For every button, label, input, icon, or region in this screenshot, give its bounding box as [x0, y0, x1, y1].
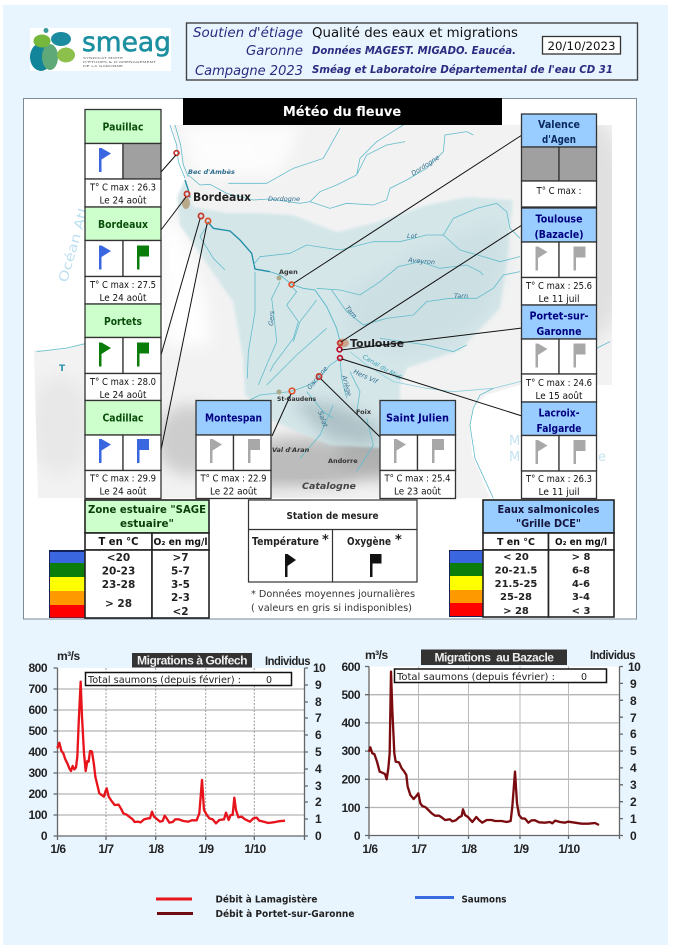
right axis labels: 9: [630, 677, 637, 691]
station: Toulouse (Bazacle): (Bazacle): [534, 228, 584, 241]
total box: 0: [581, 672, 587, 683]
legend: salmonid waters: 4-6: [572, 579, 590, 590]
unit labels: m³/s: [57, 649, 80, 663]
map labels: Bordeaux: [193, 190, 252, 204]
legend item: Lamagistère: Débit à Lamagistère: [216, 894, 318, 906]
legend: station de mesure: Température: [252, 536, 319, 548]
station: Portets: Portets: [104, 315, 142, 328]
station: Portet-sur-Garonne: Le 15 août: [536, 390, 583, 402]
legend: salmonid waters: > 8: [572, 552, 590, 563]
right axis labels: 1: [630, 812, 637, 826]
station: Montespan: T° C max : 22.9: [200, 474, 267, 484]
map labels: Ariège: [340, 373, 353, 397]
right axis labels: 10: [628, 660, 641, 674]
station: Bordeaux: T° C max : 27.5: [89, 280, 156, 291]
date box: [542, 36, 620, 54]
left axis labels: 100: [28, 808, 48, 822]
legend: estuary zone: estuaire": [120, 517, 174, 530]
x axis labels: 1/10: [558, 842, 581, 856]
legend: salmonid waters: 21.5-25: [495, 579, 537, 590]
discharge line: Lamagistère: [57, 682, 285, 823]
pale coastal strip and relief shading: [30, 120, 628, 505]
station: Cadillac: Le 24 août: [100, 486, 147, 498]
station: Toulouse (Bazacle): [522, 208, 596, 305]
map labels: Catalogne: [302, 482, 356, 492]
legend item: Saumons: [415, 894, 507, 906]
map title: [183, 98, 502, 125]
left axis labels: 300: [28, 766, 48, 780]
station: Toulouse (Bazacle): Le 11 juil: [538, 294, 580, 305]
unit labels: [365, 648, 636, 662]
station: Cadillac: [85, 400, 161, 498]
station: Portets: Le 24 août: [100, 389, 147, 401]
map labels: Toulouse: [350, 337, 404, 350]
chart legend: [156, 894, 507, 920]
x axis labels: 1/7: [98, 842, 114, 856]
station: Saint Julien: Le 23 août: [394, 486, 441, 498]
right axis labels: [628, 660, 641, 843]
left axis labels: 200: [341, 772, 361, 786]
station: Saint Julien: T° C max : 25.4: [384, 474, 451, 484]
left axis labels: 300: [341, 744, 361, 758]
map labels: Aveyron: [407, 256, 435, 266]
left axis labels: 0: [41, 829, 48, 843]
right axis labels: [313, 661, 326, 843]
x axis labels: 1/7: [411, 842, 427, 856]
map labels: e: [598, 450, 606, 465]
date box: 20/10/2023: [548, 39, 616, 53]
station: Montespan: [196, 400, 271, 498]
footnote: ( valeurs en gris si indisponibles): [251, 603, 412, 614]
campaign title: Campagne 2023: [195, 64, 303, 79]
legend: estuary zone: > 28: [105, 598, 132, 610]
x axis labels: 1/8: [461, 842, 477, 856]
footnote: [251, 589, 415, 614]
chart title: Migrations à Golfech: [137, 654, 247, 668]
station: Valence d'Agen: d'Agen: [542, 133, 576, 146]
map labels: Agen: [279, 268, 298, 276]
legend: station de mesure: Oxygène: [347, 536, 391, 548]
station: Valence d'Agen: T° C max :: [536, 186, 582, 197]
legend item: Portet-sur-Garonne: [157, 909, 354, 920]
header box: [186, 23, 638, 80]
logo: smeag: DE LA GARONNE: [83, 64, 123, 68]
map title: Météo du fleuve: [283, 105, 401, 120]
map labels: Val d'Aran: [272, 446, 310, 454]
legend: salmonid waters: 6-8: [572, 566, 590, 576]
station: Lacroix-Falgarde: Lacroix-: [538, 406, 580, 420]
station: Pauillac: [85, 110, 161, 207]
panel: map: [24, 98, 636, 619]
station: Lacroix-Falgarde: T° C max : 26.3: [525, 474, 592, 485]
right axis labels: 8: [315, 695, 322, 709]
data sources: [312, 44, 613, 76]
discharge line: Portet-sur-Garonne: [369, 672, 599, 825]
right axis labels: 2: [315, 795, 322, 809]
x axis labels: 1/6: [50, 842, 66, 856]
footnote: * Données moyennes journalières: [251, 589, 415, 600]
logo: smeag: D'ETUDES & D'AMENAGEMENT: [83, 60, 156, 64]
legend: station de mesure: Station de mesure: [286, 511, 378, 522]
station: Valence d'Agen: Valence: [538, 118, 580, 131]
map labels: Canal du Midi: [361, 353, 403, 382]
total box: [394, 669, 606, 683]
station: Portets: T° C max : 28.0: [89, 377, 156, 388]
map labels: M: [509, 434, 520, 449]
map labels: Océan Atl: [56, 207, 92, 284]
map labels: T: [59, 364, 66, 374]
left axis labels: [28, 661, 48, 843]
station: Portet-sur-Garonne: Garonne: [536, 325, 582, 338]
unit labels: Individus: [265, 654, 311, 668]
station: Bordeaux: Le 24 août: [100, 292, 147, 304]
chart: Migrations à Golfech: [28, 649, 326, 856]
left axis labels: 600: [28, 703, 48, 717]
right axis labels: 3: [630, 778, 637, 792]
legend: estuary zone: 2-3: [171, 592, 190, 604]
left axis labels: 500: [341, 688, 361, 702]
station: Saint Julien: Saint Julien: [386, 412, 449, 424]
left axis labels: 400: [341, 716, 361, 730]
legend: salmonid waters: < 3: [572, 606, 590, 617]
map labels: Tarn: [343, 304, 359, 320]
legend: estuary zone: >7: [172, 552, 189, 564]
left axis labels: 600: [341, 660, 361, 674]
unit labels: m³/s: [365, 648, 388, 662]
right axis labels: 10: [313, 661, 326, 675]
station: Portets: [85, 304, 161, 401]
legend: estuary zone: [49, 500, 209, 618]
right axis labels: 0: [315, 829, 322, 843]
station: Montespan: Le 22 août: [210, 486, 257, 498]
station: Montespan: Montespan: [205, 412, 262, 424]
legend: salmonid waters: < 20: [503, 552, 529, 563]
left axis labels: 0: [354, 829, 361, 843]
left axis labels: 100: [341, 801, 361, 815]
legend: estuary zone: <2: [172, 606, 189, 618]
legend: estuary zone: 23-28: [102, 579, 135, 591]
station: Bordeaux: [85, 207, 161, 304]
logo: smeag: [30, 27, 171, 71]
x axis labels: [50, 842, 267, 856]
chart: Migrations au Bazacle: [341, 648, 641, 856]
station: Valence d'Agen: [522, 114, 596, 207]
Garonne basin: [177, 180, 513, 448]
legend: estuary zone: 3-5: [171, 579, 190, 591]
station: Toulouse (Bazacle): T° C max : 25.6: [525, 281, 592, 292]
chart title: Migrations au Bazacle: [434, 650, 554, 664]
left axis labels: [341, 660, 361, 843]
right axis labels: 0: [630, 829, 637, 843]
right axis labels: 8: [630, 694, 637, 708]
station markers: [174, 151, 349, 394]
map labels: Dordogne: [268, 195, 300, 203]
map labels: Foix: [356, 408, 372, 416]
x axis labels: 1/10: [244, 842, 267, 856]
legend: station de mesure: *: [395, 533, 402, 548]
left axis labels: 400: [28, 745, 48, 759]
station: Pauillac: T° C max : 26.3: [89, 182, 156, 194]
map labels: M: [509, 450, 520, 465]
station: Cadillac: Cadillac: [102, 412, 144, 424]
logo: smeag: smeag: [82, 27, 171, 58]
logo: smeag: SYNDICAT MIXTE: [83, 56, 123, 60]
campaign title: Soutien d'étiage: [193, 26, 303, 41]
total box: Total saumons (depuis février) :: [396, 672, 555, 683]
x axis labels: 1/9: [198, 842, 214, 856]
legend: estuary zone: T en °C: [98, 536, 139, 548]
legend item: Saumons: Saumons: [462, 894, 507, 906]
x axis labels: 1/6: [362, 842, 378, 856]
left axis labels: 800: [28, 661, 48, 675]
campaign title: [193, 26, 303, 79]
left axis labels: 200: [28, 787, 48, 801]
x axis labels: 1/8: [148, 842, 164, 856]
map labels: [56, 154, 606, 492]
legend: salmonid waters: 3-4: [572, 592, 590, 603]
data sources: Sméag et Laboratoire Départemental de l'eau CD 31: [312, 63, 613, 76]
colour scale: [449, 550, 483, 617]
station: Bordeaux: Bordeaux: [98, 218, 148, 231]
station: Toulouse (Bazacle): Toulouse: [536, 212, 582, 226]
icon: oxygen flag: [370, 554, 382, 577]
legend: estuary zone: O₂ en mg/l: [154, 537, 208, 548]
legend: estuary zone: 20-23: [102, 566, 135, 578]
map labels: Bec d'Ambès: [188, 168, 235, 176]
map labels: Tarn: [454, 292, 468, 300]
colour scale: [49, 550, 85, 618]
right axis labels: 7: [630, 711, 637, 725]
map labels: Garonne: [305, 365, 329, 391]
station: Cadillac: T° C max : 29.9: [89, 474, 156, 484]
rivers: [37, 125, 610, 498]
station: Lacroix-Falgarde: [522, 402, 596, 498]
right axis labels: 3: [315, 779, 322, 793]
station: Lacroix-Falgarde: Falgarde: [536, 422, 582, 435]
map labels: Salat: [316, 410, 329, 429]
legend: station de mesure: [248, 500, 417, 582]
data sources: Données MAGEST. MIGADO. Eaucéa.: [312, 44, 516, 57]
legend: station de mesure: *: [322, 533, 329, 548]
legend: salmonid waters: 25-28: [500, 592, 532, 603]
right axis labels: 9: [315, 678, 322, 692]
legend: salmonid waters: T en °C: [497, 537, 535, 548]
unit labels: Individus: [590, 648, 636, 662]
station: Lacroix-Falgarde: Le 11 juil: [538, 487, 580, 498]
map labels: Gers: [267, 310, 276, 326]
right axis labels: 2: [630, 795, 637, 809]
legend: salmonid waters: O₂ en mg/l: [555, 537, 607, 548]
station: Portet-sur-Garonne: Portet-sur-: [530, 310, 588, 322]
icon: temperature flag: [285, 554, 296, 577]
right axis labels: 5: [315, 745, 322, 759]
campaign title: Garonne: [246, 44, 303, 59]
right axis labels: 7: [315, 711, 322, 725]
station: Saint Julien: [380, 400, 456, 498]
legend: salmonid waters: 20-21.5: [495, 566, 537, 576]
legend: salmonid waters: "Grille DCE": [516, 518, 581, 530]
total box: 0: [266, 675, 272, 686]
legend: salmonid waters: [449, 500, 614, 617]
total box: [86, 672, 292, 686]
right axis labels: 5: [630, 744, 637, 758]
map labels: Lot: [407, 232, 418, 240]
station: Portet-sur-Garonne: T° C max : 24.6: [525, 378, 592, 389]
legend item: Lamagistère: [156, 894, 318, 906]
leader lines: [161, 135, 522, 450]
total box: Total saumons (depuis février) :: [87, 675, 241, 686]
left axis labels: 700: [28, 682, 48, 696]
x axis labels: [362, 842, 581, 856]
right axis labels: 4: [630, 761, 637, 775]
right axis labels: 4: [315, 762, 322, 776]
station: Pauillac: Pauillac: [102, 120, 144, 134]
station: Portet-sur-Garonne: [522, 305, 596, 402]
legend: estuary zone: <20: [107, 552, 130, 564]
legend: estuary zone: Zone estuaire "SAGE: [88, 503, 206, 516]
right axis labels: 6: [315, 728, 322, 742]
right axis labels: 1: [315, 812, 322, 826]
legend item: Portet-sur-Garonne: Débit à Portet-sur-Garonne: [216, 909, 354, 920]
map labels: Andorre: [328, 457, 358, 465]
legend: salmonid waters: > 28: [503, 606, 529, 617]
station: Pauillac: Le 24 août: [100, 194, 147, 206]
left axis labels: 500: [28, 724, 48, 738]
right axis labels: 6: [630, 727, 637, 741]
land background: [34, 125, 612, 498]
legend: estuary zone: 5-7: [171, 566, 190, 578]
map labels: Hers Vif: [352, 368, 380, 386]
x axis labels: 1/9: [513, 842, 529, 856]
map labels: Dordogne: [410, 154, 441, 178]
map labels: St-Gaudens: [277, 396, 317, 403]
unit labels: [57, 649, 311, 668]
legend: salmonid waters: Eaux salmonicoles: [498, 504, 600, 516]
header subtitle: Qualité des eaux et migrations: [312, 26, 518, 41]
